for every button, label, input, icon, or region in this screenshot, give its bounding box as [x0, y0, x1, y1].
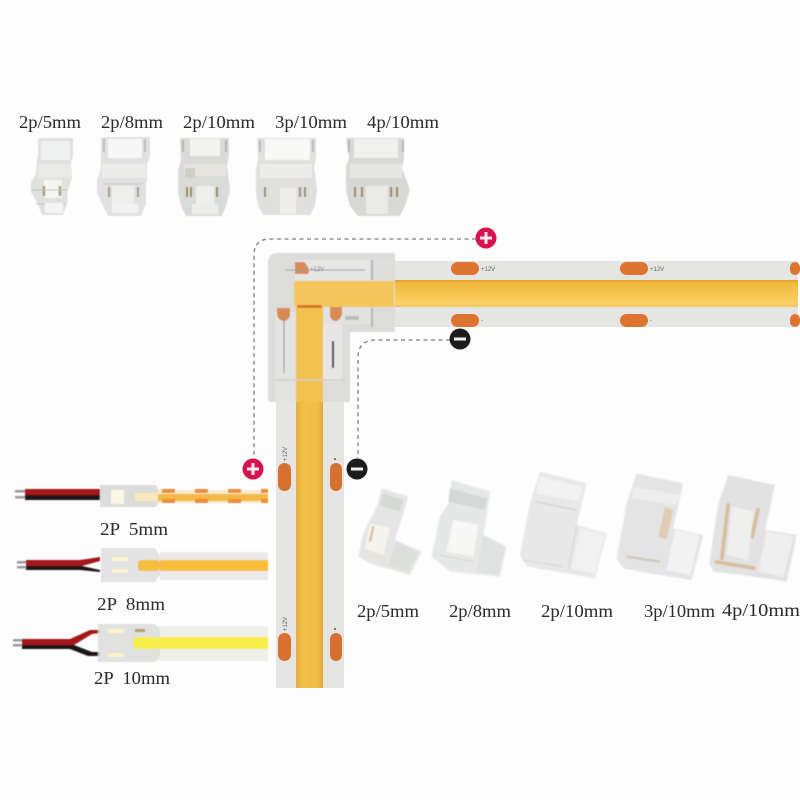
top connector labels: 3p/10mm [275, 112, 347, 132]
top connector labels: 2p/10mm [183, 112, 255, 132]
top connector labels: 2p/8mm [101, 112, 163, 132]
icon: minus lower [346, 458, 368, 480]
bottom connector labels: 2p/10mm [541, 601, 613, 621]
positive dashed lead from top [254, 239, 476, 458]
horizontal COB LED strip [390, 261, 800, 327]
L connector 4p/10mm [709, 475, 797, 582]
L connector 3p/10mm [617, 473, 703, 580]
wired connector 2P 5mm [15, 485, 268, 507]
connector 3p/10mm [256, 138, 317, 215]
yellow light band vertical [296, 395, 323, 688]
label 2P 5mm: 2P 5mm [100, 519, 168, 539]
row of L-shaped clear connectors [358, 472, 797, 582]
wired connector 2P 8mm [17, 548, 268, 582]
wired connector 2P 10mm [13, 624, 268, 662]
solder pads and polarity marks horizontal: - [650, 318, 652, 324]
vertical COB LED strip [276, 395, 344, 688]
L connector 2p/8mm [432, 480, 507, 577]
connector 4p/10mm [346, 138, 410, 216]
label 2P 10mm: 2P 10mm [94, 668, 170, 688]
negative dashed lead [358, 340, 450, 458]
connector 2p/8mm [97, 137, 150, 216]
solder pads and polarity marks horizontal: +12V [481, 267, 495, 273]
solder pads and polarity marks vertical [278, 447, 342, 661]
corner solder pads [277, 262, 342, 321]
L connector 2p/10mm [520, 472, 607, 578]
yellow light band horizontal [390, 280, 798, 307]
connector 2p/10mm [178, 138, 230, 216]
solder pads and polarity marks horizontal [451, 262, 800, 327]
L connector 2p/5mm [358, 488, 422, 575]
L-shaped corner connector on strip [268, 253, 395, 402]
icon: plus lower [242, 458, 264, 480]
label 2P 8mm: 2P 8mm [97, 594, 165, 614]
bottom connector labels [357, 600, 800, 621]
bottom connector labels: 2p/5mm [357, 601, 419, 621]
bottom connector labels: 2p/8mm [449, 601, 511, 621]
top connector labels [19, 112, 439, 132]
solder pads and polarity marks vertical: +12V [283, 617, 289, 631]
corner yellow light band [294, 281, 394, 312]
corner contact lines [275, 260, 372, 380]
bottom connector labels: 4p/10mm [722, 600, 800, 620]
top connector labels: 2p/5mm [19, 112, 81, 132]
top connector labels: 4p/10mm [367, 112, 439, 132]
connector 2p/5mm [31, 138, 73, 215]
icon: plus top [476, 228, 496, 248]
solder pads and polarity marks horizontal: +12V [650, 267, 664, 273]
top row of straight clear connectors [31, 137, 410, 216]
corner solder pads: +12V [310, 267, 324, 273]
icon: minus top [450, 328, 470, 350]
bottom connector labels: 3p/10mm [644, 601, 715, 621]
solder pads and polarity marks vertical: +12V [283, 447, 289, 461]
solder pads and polarity marks horizontal: - [481, 318, 483, 324]
